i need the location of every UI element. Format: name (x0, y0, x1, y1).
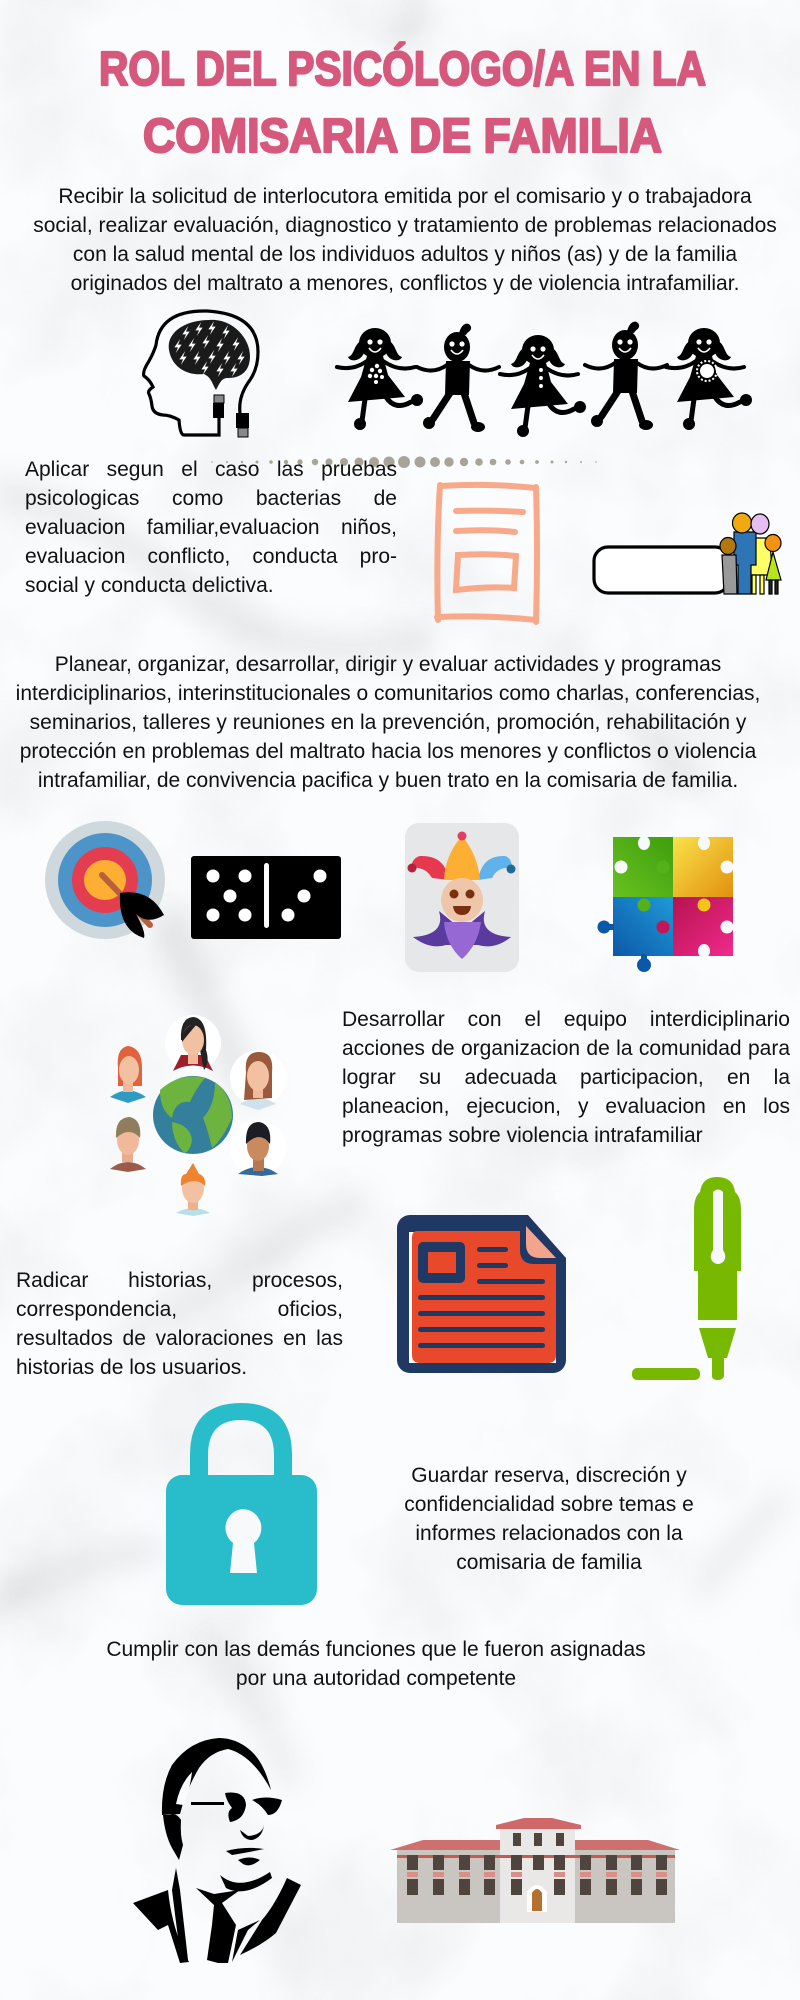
text block: other duties: por una autoridad competente (236, 1667, 516, 1690)
text block: apply tests: Aplicar segun el caso las pruebas (25, 458, 397, 481)
text block: apply tests: social y conducta delictiva. (25, 574, 274, 597)
text block: other duties (106, 1638, 646, 1690)
text block: receive request: social, realizar evaluación, diagnostico y tratamiento de problemas relacionados (33, 214, 777, 237)
icon: black silhouette portrait (133, 1738, 301, 1963)
icon: teal padlock (166, 1403, 317, 1605)
icon: green highlighter pen (632, 1177, 741, 1380)
text block: file records: resultados de valoraciones en las (16, 1327, 343, 1350)
text block: develop with team: Desarrollar con el equipo interdiciplinario (342, 1008, 790, 1031)
title: COMISARIA DE FAMILIA (143, 110, 662, 163)
title: ROL DEL PSICÓLOGO/A EN LA (99, 41, 706, 96)
icon: jester card (405, 823, 519, 972)
icon: head with brain and usb cable (144, 311, 258, 437)
text block: apply tests: evaluacion familiar,evaluacion niños, (25, 516, 397, 539)
icon: newspaper document (397, 1215, 566, 1373)
text block: develop with team (342, 1008, 790, 1147)
text block: plan activities (16, 653, 760, 792)
text block: apply tests: evaluacion conflicto, conducta pro- (25, 545, 397, 568)
text block: receive request: Recibir la solicitud de interlocutora emitida por el comisario y o trabajadora (58, 185, 752, 208)
text block: receive request: con la salud mental de los individuos adultos y niños (as) y de la familia (73, 243, 737, 266)
text block: plan activities: protección en problemas del maltrato hacia los menores y conflictos o violencia (20, 740, 756, 763)
text block: other duties: Cumplir con las demás funciones que le fueron asignadas (106, 1638, 646, 1661)
text block: file records: Radicar historias, procesos, (16, 1269, 343, 1292)
text block: file records: correspondencia, oficios, (16, 1298, 343, 1321)
text block: develop with team: planeacion, ejecucion, y evaluacion en los (342, 1095, 790, 1118)
text block: confidentiality: comisaria de familia (456, 1551, 642, 1574)
text block: file records: historias de los usuarios. (16, 1356, 247, 1379)
text block: plan activities: Planear, organizar, desarrollar, dirigir y evaluar actividades y programas (55, 653, 721, 676)
text block: apply tests: psicologicas como bacterias de (25, 487, 397, 510)
text block: develop with team: programas sobre violencia intrafamiliar (342, 1124, 703, 1147)
text block: plan activities: intrafamiliar, de convivencia pacifica y buen trato en la comisaria de familia. (38, 769, 738, 792)
text block: confidentiality: confidencialidad sobre temas e (404, 1493, 694, 1516)
icon: orange hand-drawn document (437, 485, 537, 622)
icon: domino tile (191, 856, 341, 939)
text block: confidentiality: informes relacionados con la (415, 1522, 683, 1545)
title (99, 41, 706, 163)
text block: confidentiality: Guardar reserva, discreción y (411, 1464, 687, 1487)
text block: confidentiality (404, 1464, 694, 1574)
text block: apply tests (25, 458, 397, 597)
icon: colorful puzzle (598, 836, 734, 972)
icon: children holding hands (337, 322, 752, 437)
text block: plan activities: interdiciplinarios, interinstitucionales o comunitarios como charlas, conferencias, (16, 682, 760, 705)
text block: file records (16, 1269, 343, 1379)
text block: receive request (33, 185, 777, 295)
icon: white pill box with family (594, 513, 781, 594)
text block: receive request: originados del maltrato a menores, conflictos y de violencia intrafamiliar. (71, 272, 739, 295)
text block: develop with team: acciones de organizacion de la comunidad para (342, 1037, 790, 1060)
text block: plan activities: seminarios, talleres y reuniones en la prevención, promoción, rehabilitación y (30, 711, 746, 734)
icon: municipal building (390, 1818, 680, 1923)
icon: archery target (45, 821, 165, 939)
icon: globe with people network (110, 1015, 286, 1216)
text block: develop with team: lograr su adecuada participacion, en la (342, 1066, 790, 1089)
